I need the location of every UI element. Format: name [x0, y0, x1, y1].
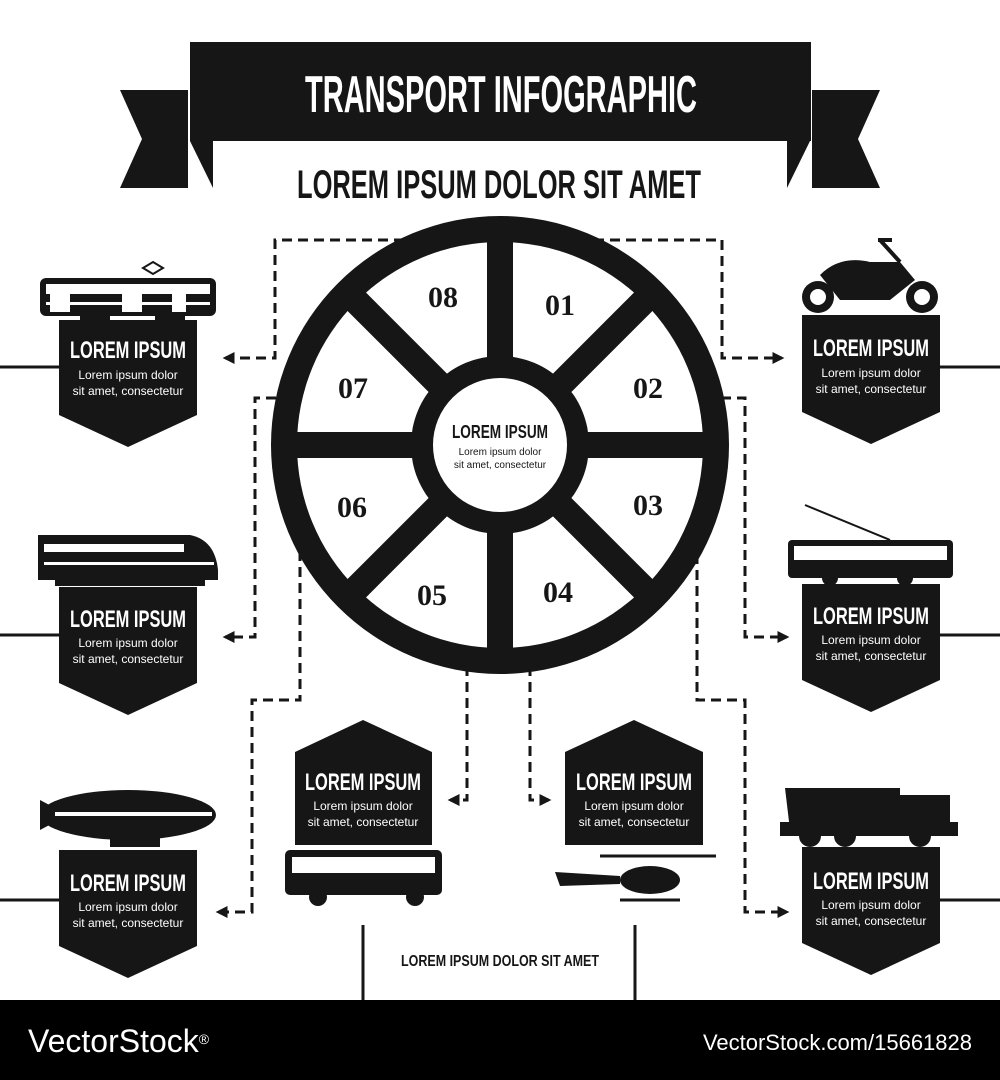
card: right 2: sit amet, consectetur — [816, 649, 926, 663]
side lines — [0, 367, 1000, 1000]
hub text — [452, 422, 548, 471]
hub text: sit amet, consectetur — [454, 460, 547, 471]
icon: helicopter — [555, 856, 716, 900]
card: left 3: LOREM IPSUM — [70, 870, 186, 897]
segment numbers: 03 — [633, 489, 663, 522]
card: left 2: LOREM IPSUM — [70, 606, 186, 633]
card: right 3: Lorem ipsum dolor — [821, 898, 921, 912]
card: right 2: Lorem ipsum dolor — [821, 633, 921, 647]
segment numbers: 05 — [417, 579, 447, 612]
card: bottom middle left — [295, 720, 432, 845]
footer bar: VectorStock.com/15661828 — [703, 1030, 972, 1055]
card: right 1: sit amet, consectetur — [816, 382, 926, 396]
card: right 2: LOREM IPSUM — [813, 603, 929, 630]
card: right 1: LOREM IPSUM — [813, 335, 929, 362]
card: left 1: LOREM IPSUM — [70, 337, 186, 364]
wheel chart — [271, 216, 729, 674]
segment numbers: 01 — [545, 289, 575, 322]
card: right 1 — [802, 315, 940, 444]
card: left 2: Lorem ipsum dolor — [78, 636, 178, 650]
card: bottom middle left: LOREM IPSUM — [305, 769, 421, 796]
icon: tram — [40, 262, 216, 322]
card: bottom middle right: Lorem ipsum dolor — [584, 799, 684, 813]
hub text: Lorem ipsum dolor — [459, 447, 542, 458]
bottom caption: LOREM IPSUM DOLOR SIT AMET — [401, 953, 599, 970]
card: left 1: sit amet, consectetur — [73, 384, 183, 398]
footer bar — [0, 1000, 1000, 1080]
title banner — [120, 42, 880, 188]
card: left 3 — [59, 850, 197, 978]
card: bottom middle right: LOREM IPSUM — [576, 769, 692, 796]
subtitle: LOREM IPSUM DOLOR SIT AMET — [297, 163, 701, 207]
hub text: LOREM IPSUM — [452, 422, 548, 442]
card: right 3: LOREM IPSUM — [813, 868, 929, 895]
segment numbers: 02 — [633, 372, 663, 405]
card: left 1 — [59, 320, 197, 447]
card: left 2 — [59, 587, 197, 715]
icon: high speed train — [38, 535, 218, 586]
card: right 3: sit amet, consectetur — [816, 914, 926, 928]
dashed connectors — [218, 240, 787, 912]
card: left 3: Lorem ipsum dolor — [78, 900, 178, 914]
icon: airship — [40, 790, 216, 847]
segment numbers: 06 — [337, 491, 367, 524]
card: left 2: sit amet, consectetur — [73, 652, 183, 666]
card: left 3: sit amet, consectetur — [73, 916, 183, 930]
card: bottom middle right: sit amet, consectetur — [579, 815, 689, 829]
card: bottom middle right — [565, 720, 703, 845]
segment numbers: 04 — [543, 576, 573, 609]
card: right 1: Lorem ipsum dolor — [821, 366, 921, 380]
segment numbers — [337, 281, 663, 612]
card: right 3 — [802, 847, 940, 975]
icon: trolleybus — [788, 505, 953, 586]
segment numbers: 07 — [338, 372, 368, 405]
icon: dump truck — [780, 788, 958, 847]
card: bottom middle left: sit amet, consectetur — [308, 815, 418, 829]
icon: bus — [285, 850, 442, 906]
card: left 1: Lorem ipsum dolor — [78, 368, 178, 382]
card: right 2 — [802, 584, 940, 712]
card: bottom middle left: Lorem ipsum dolor — [313, 799, 413, 813]
icon: motorcycle — [802, 240, 938, 313]
title banner: TRANSPORT INFOGRAPHIC — [305, 66, 697, 124]
segment numbers: 08 — [428, 281, 458, 314]
footer bar: VectorStock® — [28, 1023, 210, 1059]
